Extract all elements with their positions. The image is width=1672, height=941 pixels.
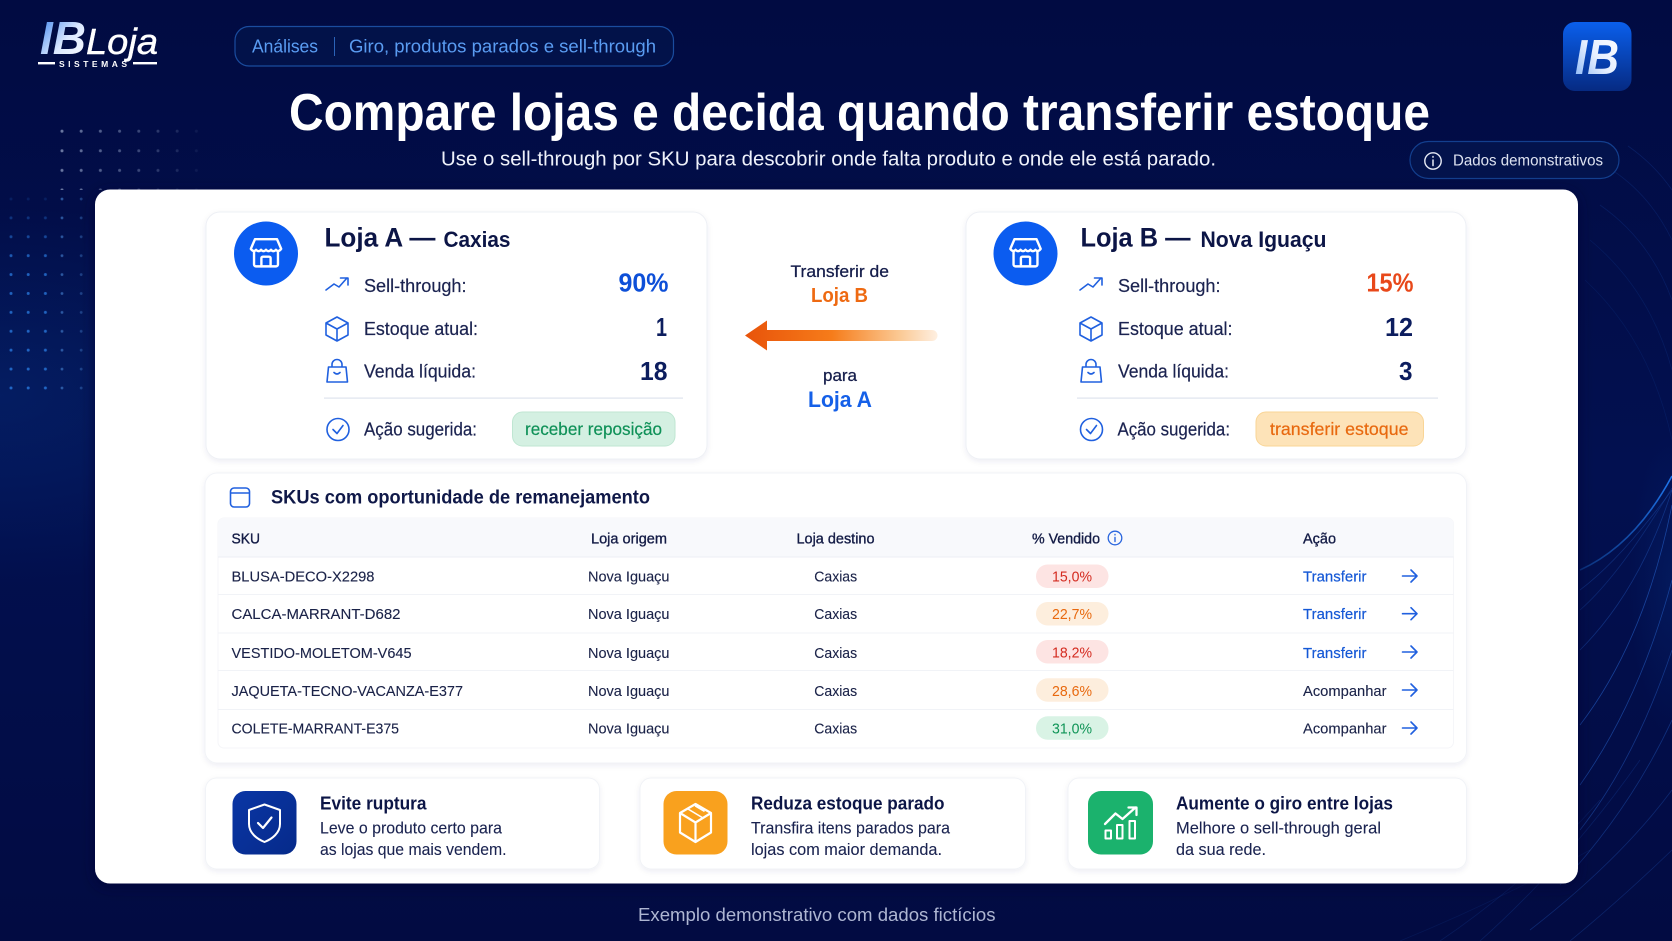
- store A name: Caxias: [444, 227, 510, 252]
- row: BLUSA-DECO-X2298: BLUSA-DECO-X2298: [232, 568, 374, 586]
- row: COLETE-MARRANT-E375: Nova Iguaçu: [588, 720, 670, 738]
- logo: IB Loja Sistemas: IB: [40, 12, 86, 64]
- row: JAQUETA-TECNO-VACANZA-E377: 28,6%: [1052, 683, 1092, 700]
- panel: main white: [95, 190, 1578, 884]
- row: JAQUETA-TECNO-VACANZA-E377: Caxias: [814, 683, 857, 700]
- row: VESTIDO-MOLETOM-V645: Caxias: [814, 645, 857, 662]
- row: BLUSA-DECO-X2298: [232, 564, 1417, 588]
- row: COLETE-MARRANT-E375: [232, 716, 1417, 740]
- breadcrumb pill: Análises: [252, 36, 318, 56]
- table header: Ação: [1303, 530, 1336, 548]
- breadcrumb pill: Giro, produtos parados e sell-through: [349, 36, 656, 56]
- row: CALCA-MARRANT-D682: 22,7%: [1052, 606, 1092, 623]
- row: BLUSA-DECO-X2298: 15,0%: [1052, 568, 1092, 586]
- row: VESTIDO-MOLETOM-V645: VESTIDO-MOLETOM-V645: [232, 645, 412, 662]
- row: CALCA-MARRANT-D682: Transferir: [1303, 606, 1366, 623]
- card: Aumente o giro: Melhore o sell-through geral: [1176, 820, 1381, 838]
- row: sell-through A: [326, 268, 668, 298]
- badge: dados demonstrativos: [1410, 142, 1619, 178]
- row: VESTIDO-MOLETOM-V645: 18,2%: [1052, 645, 1092, 662]
- transfer direction: [745, 262, 938, 412]
- row: ação sugerida A: Ação sugerida:: [364, 420, 477, 440]
- icon: shield: [232, 791, 296, 854]
- panel: Loja B: [966, 212, 1466, 459]
- card: Evite ruptura: Evite ruptura: [320, 794, 427, 814]
- card: Aumente o giro: Aumente o giro entre lojas: [1176, 794, 1393, 814]
- app icon: IB: IB: [1575, 31, 1619, 85]
- row: ação sugerida A: receber reposição: [525, 419, 662, 439]
- card: Evite ruptura: [206, 778, 600, 869]
- row: JAQUETA-TECNO-VACANZA-E377: Nova Iguaçu: [588, 683, 670, 700]
- card: Reduza estoque parado: Transfira itens parados para: [751, 820, 951, 838]
- row: venda B: 3: [1399, 356, 1412, 386]
- table title: SKUs com oportunidade de remanejamento: [271, 488, 650, 508]
- row: COLETE-MARRANT-E375: 31,0%: [1052, 720, 1092, 738]
- icon: table box: [230, 488, 250, 507]
- app icon: IB: [1563, 22, 1632, 91]
- logo: IB Loja Sistemas: Loja: [86, 21, 158, 62]
- transfer direction: Transferir de: [790, 262, 889, 281]
- card: Reduza estoque parado: lojas com maior demanda.: [751, 841, 942, 859]
- card: Aumente o giro: da sua rede.: [1176, 841, 1266, 859]
- card: Reduza estoque parado: [640, 778, 1026, 869]
- row: CALCA-MARRANT-D682: Caxias: [814, 606, 857, 623]
- row: COLETE-MARRANT-E375: Acompanhar: [1303, 720, 1386, 738]
- icon: growth chart: [1088, 791, 1153, 854]
- row: CALCA-MARRANT-D682: [232, 602, 1417, 626]
- row: venda B: [1081, 356, 1412, 386]
- store A name: [324, 222, 510, 252]
- row: sell-through A: Sell-through:: [364, 276, 466, 296]
- badge: dados demonstrativos: Dados demonstrativos: [1453, 153, 1603, 170]
- icon: store B: [994, 222, 1058, 286]
- transfer direction: para: [823, 366, 858, 385]
- row: venda A: Venda líquida:: [364, 362, 476, 382]
- row: estoque B: Estoque atual:: [1118, 319, 1232, 339]
- row: VESTIDO-MOLETOM-V645: [232, 640, 1417, 664]
- row: venda A: 18: [640, 356, 668, 386]
- table header: % Vendido: [1032, 530, 1100, 548]
- transfer direction: Loja B: [811, 285, 868, 307]
- row: venda A: [327, 356, 668, 386]
- transfer direction: Loja A: [808, 387, 872, 412]
- row: estoque B: 12: [1385, 312, 1413, 342]
- row: COLETE-MARRANT-E375: Caxias: [814, 720, 857, 738]
- row: estoque A: 1: [656, 312, 667, 342]
- row: BLUSA-DECO-X2298: Nova Iguaçu: [588, 568, 670, 586]
- row: sell-through B: 15%: [1366, 268, 1414, 298]
- panel: SKU table: [205, 473, 1466, 763]
- card: Evite ruptura: Leve o produto certo para: [320, 820, 503, 838]
- title: Compare lojas e decida quando transferir estoque: [289, 84, 1430, 142]
- row: JAQUETA-TECNO-VACANZA-E377: [232, 678, 1417, 702]
- row: ação sugerida B: transferir estoque: [1270, 419, 1408, 439]
- table header: [218, 518, 1454, 558]
- row: VESTIDO-MOLETOM-V645: Transferir: [1303, 645, 1366, 662]
- row: sell-through B: Sell-through:: [1118, 276, 1220, 296]
- logo: IB Loja Sistemas: SISTEMAS: [59, 59, 127, 69]
- arrow: to Loja A: [745, 320, 938, 350]
- row: estoque A: [326, 312, 667, 342]
- row: JAQUETA-TECNO-VACANZA-E377: Acompanhar: [1303, 683, 1386, 700]
- panel: Loja A: [206, 212, 707, 459]
- row: sell-through A: 90%: [618, 268, 668, 298]
- store A name: Loja A —: [324, 222, 436, 252]
- row: BLUSA-DECO-X2298: Caxias: [814, 568, 857, 586]
- row: venda B: Venda líquida:: [1118, 362, 1229, 382]
- row: JAQUETA-TECNO-VACANZA-E377: JAQUETA-TECNO-VACANZA-E377: [232, 683, 463, 700]
- table header: Loja destino: [796, 530, 874, 548]
- table header: SKU: [232, 530, 260, 548]
- row: CALCA-MARRANT-D682: Nova Iguaçu: [588, 606, 670, 623]
- footer note: Exemplo demonstrativo com dados fictícios: [638, 905, 996, 925]
- row: sell-through B: [1080, 268, 1414, 298]
- icon: package: [664, 791, 728, 854]
- row: ação sugerida A: [327, 412, 675, 446]
- table header: Loja origem: [591, 530, 667, 548]
- store B name: Loja B —: [1080, 222, 1190, 252]
- card: Aumente o giro: [1068, 778, 1466, 869]
- breadcrumb pill: [235, 26, 674, 66]
- row: CALCA-MARRANT-D682: CALCA-MARRANT-D682: [232, 606, 400, 623]
- store B name: [1080, 222, 1326, 252]
- row: estoque A: Estoque atual:: [364, 319, 478, 339]
- store B name: Nova Iguaçu: [1200, 227, 1326, 252]
- card: Reduza estoque parado: Reduza estoque parado: [751, 794, 944, 814]
- subtitle: Use o sell-through por SKU para descobrir onde falta produto e onde ele está parado.: [441, 148, 1216, 170]
- row: COLETE-MARRANT-E375: COLETE-MARRANT-E375: [232, 720, 399, 738]
- row: ação sugerida B: [1080, 412, 1424, 446]
- row: ação sugerida B: Ação sugerida:: [1118, 420, 1230, 440]
- card: Evite ruptura: as lojas que mais vendem.: [320, 841, 506, 859]
- logo: IB Loja Sistemas: [38, 12, 158, 69]
- row: BLUSA-DECO-X2298: Transferir: [1303, 568, 1366, 586]
- row: estoque B: [1080, 312, 1413, 342]
- icon: store A: [234, 222, 298, 286]
- row: VESTIDO-MOLETOM-V645: Nova Iguaçu: [588, 645, 670, 662]
